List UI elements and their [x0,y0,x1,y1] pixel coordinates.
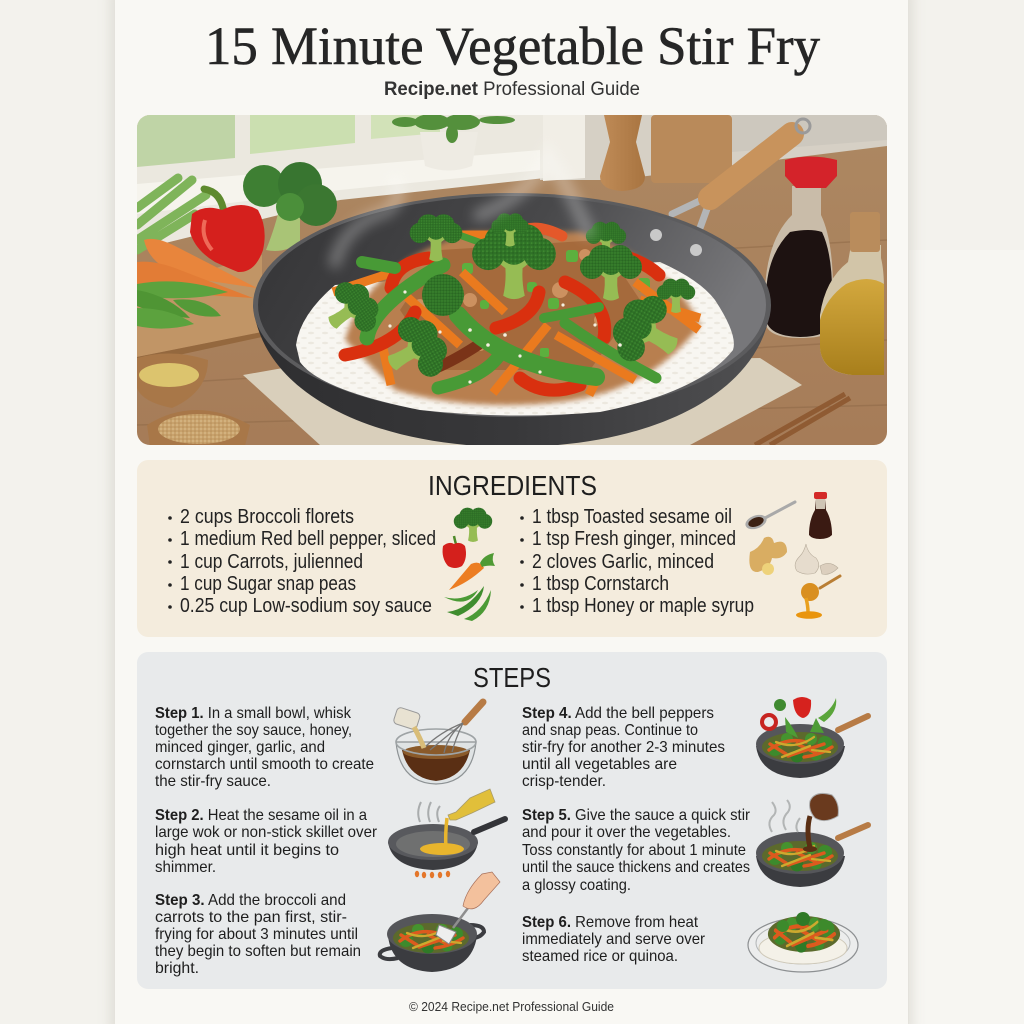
pan handle [672,119,810,228]
ingredient list: seasonings: 2 cloves Garlic, minced [532,551,714,573]
icon: carrot [449,553,495,590]
snap peas [137,281,228,329]
ingredient list: seasonings: 1 tsp Fresh ginger, minced [532,528,736,550]
step 6 text: immediately and serve over [522,931,706,948]
potted plant [392,114,515,170]
ingredient list: vegetables and soy: 1 cup Sugar snap peas [180,573,356,595]
step 1 text: the stir-fry sauce. [155,773,271,790]
whole broccoli [243,162,337,251]
ingredient list: seasonings: 1 tbsp Cornstarch [532,573,669,595]
step 6 text: steamed rice or quinoa. [522,948,678,965]
ingredient list: vegetables and soy [168,506,436,617]
step 6 text [522,914,706,965]
heading: steps: STEPS [473,662,551,693]
step 2 text [155,807,378,876]
icon: hand stirring vegetables in wok [380,872,500,972]
icon: peppers and peas tossed into wok [756,697,868,778]
icon: red pepper [443,536,466,568]
step 4 text: until all vegetables are [522,756,677,773]
panel: steps [137,652,887,989]
icon: ginger [749,537,787,575]
small bowl of ginger [137,353,208,408]
sesame seeds [388,290,622,384]
step 2 text: high heat until it begins to [155,842,339,859]
icon: garlic [795,544,838,574]
chopsticks [755,394,850,445]
step 1 text [155,705,374,790]
step 5 text: until the sauce thickens and creates [522,859,750,876]
step 1 text: cornstarch until smooth to create [155,756,374,773]
rice [296,232,734,416]
step 3 text: they begin to soften but remain [155,943,361,960]
carrot strips [333,235,700,395]
icon: broccoli [454,508,492,542]
stir fry vegetables [315,213,700,395]
step 5 text: a glossy coating. [522,877,631,894]
pepper mill [600,115,645,191]
kitchen backdrop [137,115,887,445]
green onions [137,178,206,250]
step 3 text [155,892,361,977]
ingredient list: seasonings: 1 tbsp Honey or maple syrup [532,595,754,617]
wooden board [651,115,732,183]
step 4 text: crisp-tender. [522,773,606,790]
linen napkin [243,358,802,445]
subtitle: Recipe.net Professional Guide [384,78,640,100]
icon: honey dipper [796,576,840,619]
title: 15 Minute Vegetable Stir Fry [205,16,820,76]
step 3 text: frying for about 3 minutes until [155,926,358,943]
ingredient list: seasonings: 1 tbsp Toasted sesame oil [532,506,732,528]
carrots [137,239,257,298]
step 2 text: large wok or non-stick skillet over [155,824,378,841]
step 5 text: Step 5. Give the sauce a quick stir [522,807,751,824]
step 1 text: together the soy sauce, honey, [155,722,352,739]
step 5 text: and pour it over the vegetables. [522,824,731,841]
wok [253,193,771,447]
icon: soy sauce bottle [809,492,832,539]
icon: pouring sauce over vegetables [756,793,868,887]
cutting board [137,255,262,364]
icon: whisking sauce in a bowl [393,702,483,784]
steam [335,155,588,262]
step 4 text: stir-fry for another 2-3 minutes [522,739,725,756]
broccoli florets [472,224,556,299]
step 3 text: carrots to the pan first, stir- [155,909,347,926]
icon: spoon of sesame oil [743,502,795,532]
hero photo: vegetable stir fry in a wok [137,114,887,447]
icon: plated stir fry over rice [748,912,858,972]
step 1 text: Step 1. In a small bowl, whisk [155,705,352,722]
step 5 text: Toss constantly for about 1 minute [522,842,746,859]
sauced bits and small greens [400,240,650,370]
red bell pepper [190,189,265,272]
panel: ingredients [137,460,887,637]
snap pea pods [362,236,656,388]
red pepper strips [345,228,659,390]
step 2 text: Step 2. Heat the sesame oil in a [155,807,367,824]
step 4 text: Step 4. Add the bell peppers [522,705,714,722]
step 4 text: and snap peas. Continue to [522,722,698,739]
step 1 text: minced ginger, garlic, and [155,739,325,756]
olive oil bottle [820,212,884,375]
ingredient list: vegetables and soy: 0.25 cup Low-sodium soy sauce [180,595,432,617]
step 4 text [522,705,725,790]
footer: © 2024 Recipe.net Professional Guide [409,1000,614,1014]
small bowl of sesame seeds [147,410,250,446]
step 3 text: bright. [155,960,199,977]
step 5 text [522,807,751,894]
ingredient list: vegetables and soy: 2 cups Broccoli florets [180,506,354,528]
icon: oil pouring into skillet [388,789,505,878]
heading: ingredients: INGREDIENTS [428,470,597,501]
ingredient list: seasonings [520,506,754,617]
soy sauce bottle [765,156,837,338]
step 2 text: shimmer. [155,859,216,876]
ingredient list: vegetables and soy: 1 cup Carrots, julienned [180,551,363,573]
ingredient list: vegetables and soy: 1 medium Red bell pepper, sliced [180,528,436,550]
step 6 text: Step 6. Remove from heat [522,914,699,931]
step 3 text: Step 3. Add the broccoli and [155,892,346,909]
icon: snap peas [444,586,491,621]
